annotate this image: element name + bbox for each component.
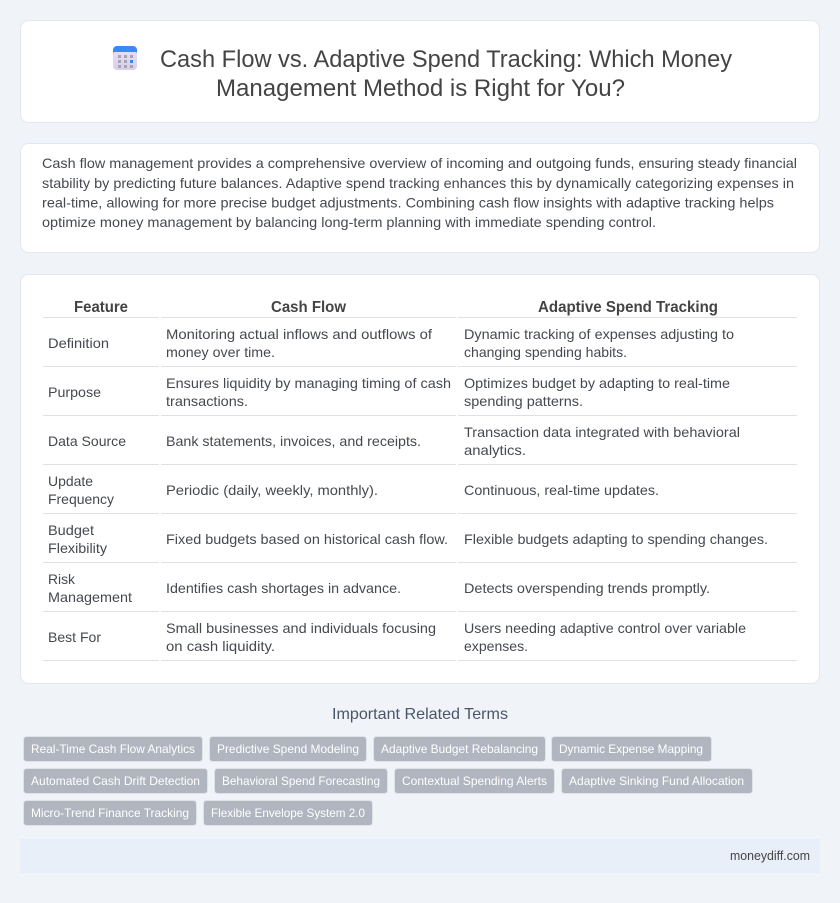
icon: calendar	[113, 46, 137, 70]
row: risk management: Detects overspending trends promptly.	[464, 580, 710, 596]
row: purpose: Optimizes budget by adapting to real-time	[464, 375, 730, 391]
table header: Feature	[74, 299, 128, 316]
panel: introduction text: Cash flow management provides a comprehensive overview of incoming and outgoing funds, ensuring steady financial	[42, 155, 797, 171]
tag list: Automated Cash Drift Detection	[31, 774, 200, 788]
row: purpose	[48, 375, 730, 409]
row: definition	[48, 326, 734, 360]
tag list	[24, 736, 752, 826]
row: purpose: spending patterns.	[464, 393, 583, 409]
row: update frequency	[48, 473, 659, 507]
row: best for: Users needing adaptive control over variable	[464, 620, 746, 636]
heading: important related terms: Important Related Terms	[332, 706, 508, 723]
row: update frequency: Periodic (daily, weekly, monthly).	[166, 482, 378, 498]
row: budget flexibility: Flexible budgets adapting to spending changes.	[464, 531, 768, 547]
row: budget flexibility: Fixed budgets based on historical cash flow.	[166, 531, 448, 547]
tag list: Dynamic Expense Mapping	[559, 742, 703, 756]
row: budget flexibility: Budget	[48, 522, 94, 538]
tag list: Adaptive Sinking Fund Allocation	[569, 774, 744, 788]
row: risk management: Identifies cash shortages in advance.	[166, 580, 401, 596]
table header: Cash Flow	[271, 299, 347, 316]
row: definition: Monitoring actual inflows and outflows of	[166, 326, 432, 342]
tag list: Behavioral Spend Forecasting	[222, 774, 380, 788]
row: data source	[48, 424, 740, 458]
row: definition: changing spending habits.	[464, 344, 627, 360]
table header	[74, 299, 718, 316]
row: risk management: Risk	[48, 571, 76, 587]
row: budget flexibility	[48, 522, 768, 556]
row: budget flexibility: Flexibility	[48, 540, 107, 556]
row: risk management	[48, 571, 710, 605]
footer: moneydiff.com	[730, 848, 810, 863]
row: purpose: Ensures liquidity by managing timing of cash	[166, 375, 451, 391]
row: update frequency: Update	[48, 473, 93, 489]
tag list: Predictive Spend Modeling	[217, 742, 359, 756]
row: data source: analytics.	[464, 442, 526, 458]
row: purpose: transactions.	[166, 393, 248, 409]
tag list: Micro-Trend Finance Tracking	[31, 806, 189, 820]
row: definition: money over time.	[166, 344, 275, 360]
row: purpose: Purpose	[48, 384, 101, 400]
panel: introduction text: stability by predicting future balances. Adaptive spend tracking enhances this by dynamically categorizing expenses in	[42, 175, 794, 191]
row: update frequency: Frequency	[48, 491, 114, 507]
row: best for: Small businesses and individuals focusing	[166, 620, 436, 636]
row: definition: Definition	[48, 335, 109, 351]
panel: introduction text: real-time, allowing for more precise budget adjustments. Combining cash flow insights with adaptive tracking helps	[42, 194, 774, 210]
tag list: Real-Time Cash Flow Analytics	[31, 742, 195, 756]
table header: Adaptive Spend Tracking	[538, 299, 718, 316]
row: data source: Data Source	[48, 433, 126, 449]
panel: title header	[20, 20, 820, 122]
row: best for: Best For	[48, 629, 101, 645]
title: Cash Flow vs. Adaptive Spend Tracking: Which Money	[160, 46, 732, 73]
footer	[20, 839, 820, 873]
row: risk management: Management	[48, 589, 132, 605]
panel: comparison table	[20, 274, 820, 684]
panel: introduction text: optimize money management by balancing long-term planning with immediate spending control.	[42, 214, 656, 230]
row: best for	[48, 620, 746, 654]
tag list: Adaptive Budget Rebalancing	[381, 742, 538, 756]
tag list: Flexible Envelope System 2.0	[211, 806, 365, 820]
row: definition: Dynamic tracking of expenses adjusting to	[464, 326, 734, 342]
panel: introduction text	[20, 144, 820, 252]
tag list: Contextual Spending Alerts	[402, 774, 547, 788]
row: data source: Transaction data integrated with behavioral	[464, 424, 740, 440]
row: best for: expenses.	[464, 638, 528, 654]
row: update frequency: Continuous, real-time updates.	[464, 482, 659, 498]
title: Management Method is Right for You?	[216, 75, 625, 102]
row: data source: Bank statements, invoices, and receipts.	[166, 433, 421, 449]
row: best for: on cash liquidity.	[166, 638, 275, 654]
title	[160, 46, 732, 102]
